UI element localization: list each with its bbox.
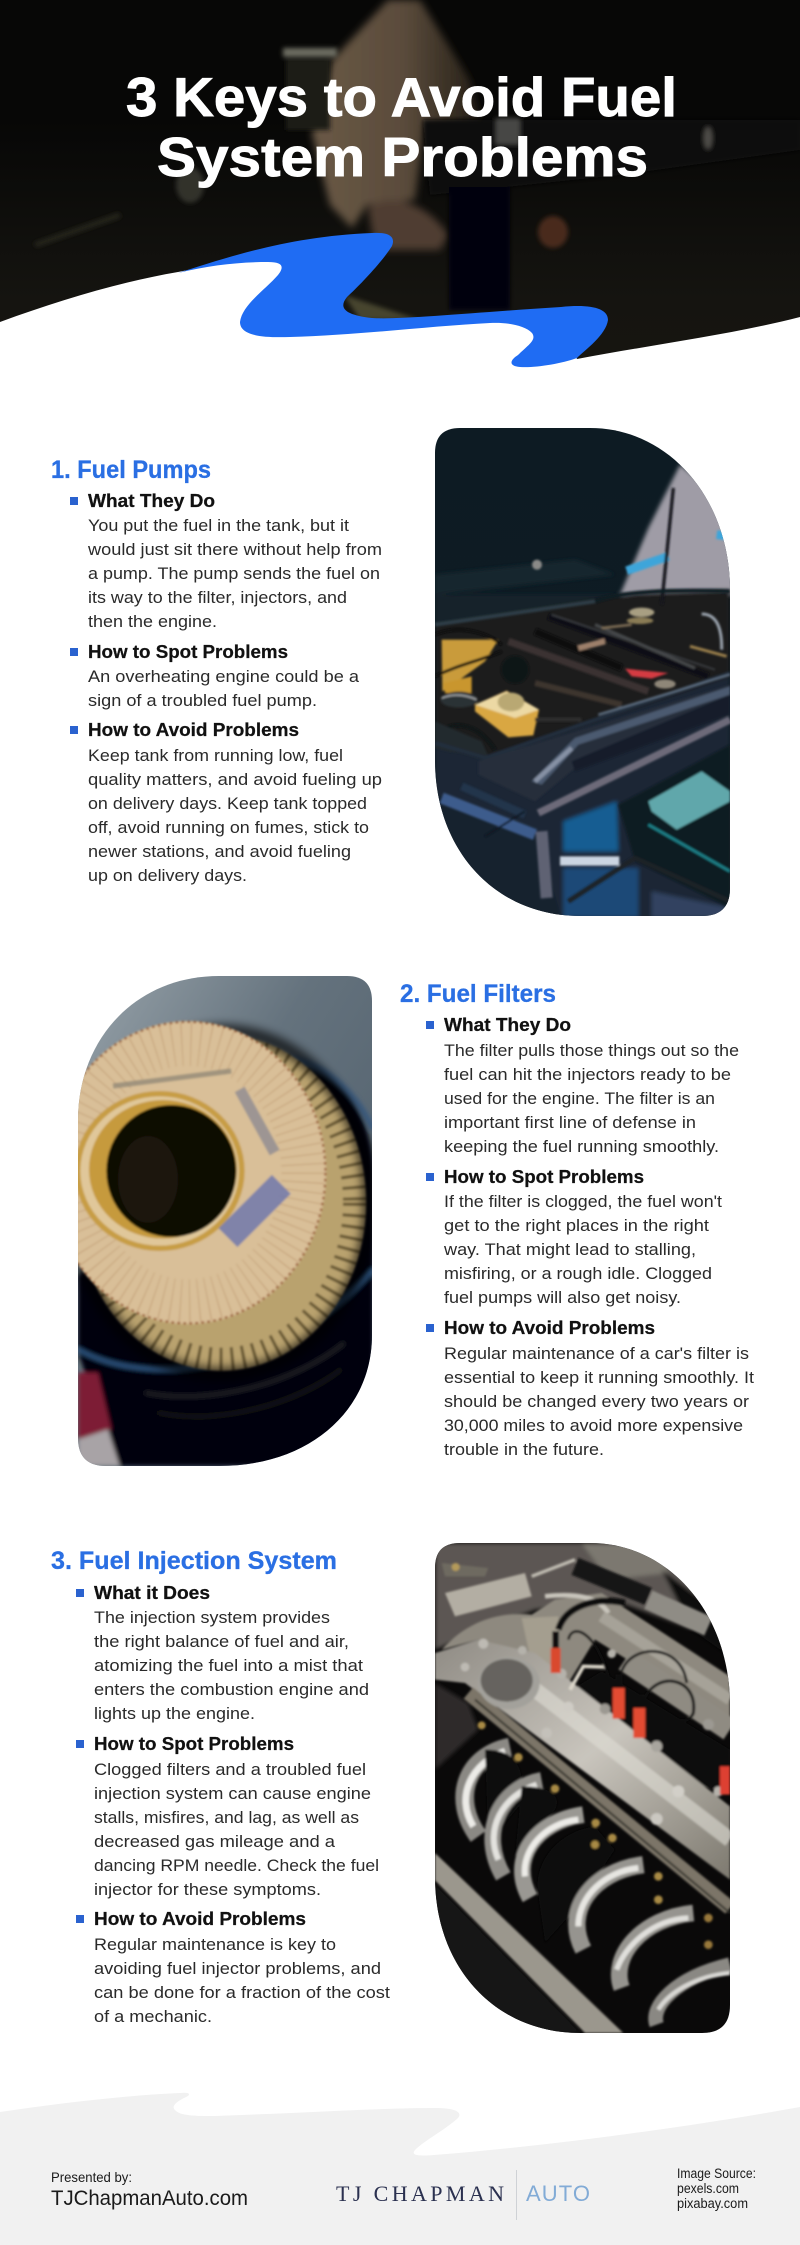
item: how to avoid problems: essential to keep it running smoothly. It — [444, 1369, 754, 1387]
item: how to spot problems: dancing RPM needle. Check the fuel — [94, 1857, 379, 1875]
item: how to avoid problems: How to Avoid Problems — [444, 1318, 655, 1338]
item: what they do: keeping the fuel running smoothly. — [444, 1138, 719, 1156]
item: how to avoid problems: Regular maintenance is key to — [94, 1936, 336, 1954]
item: how to avoid problems: should be changed every two years or — [444, 1393, 750, 1411]
item: how to spot problems: If the filter is clogged, the fuel won't — [444, 1193, 722, 1211]
image source credits — [677, 2166, 756, 2211]
presented by — [51, 2169, 248, 2210]
item: how to avoid problems: Keep tank from running low, fuel — [88, 747, 343, 765]
item: what they do: its way to the filter, injectors, and — [88, 589, 347, 607]
item: how to avoid problems: trouble in the future. — [444, 1441, 604, 1459]
item: how to spot problems: stalls, misfires, and lag, as well as — [94, 1809, 359, 1827]
item: how to spot problems — [70, 642, 360, 710]
item: what it does: lights up the engine. — [94, 1705, 255, 1723]
item: what they do: What They Do — [88, 491, 215, 511]
item: how to spot problems: fuel pumps will also get noisy. — [444, 1289, 681, 1307]
footer band — [0, 2093, 800, 2245]
panel: fuel injection system text — [51, 1547, 390, 2026]
presented by: TJChapmanAuto.com — [51, 2187, 248, 2210]
item: what they do — [426, 1015, 739, 1156]
heading: fuel filters: 2. Fuel Filters — [400, 980, 556, 1008]
header photo: hand holding fuel nozzle — [0, 0, 800, 359]
item: how to avoid problems: How to Avoid Problems — [94, 1909, 306, 1929]
item: what they do: What They Do — [444, 1015, 571, 1035]
photo: car engine bay under open hood — [435, 428, 735, 918]
item: what they do — [70, 491, 382, 631]
image source credits: Image Source: — [677, 2166, 756, 2181]
item: what they do: used for the engine. The filter is an — [444, 1090, 715, 1108]
logo: TJ Chapman Auto — [336, 2170, 590, 2220]
item: how to spot problems: get to the right places in the right — [444, 1217, 709, 1235]
heading: fuel pumps: 1. Fuel Pumps — [51, 456, 211, 484]
panel: fuel pumps text — [51, 456, 382, 885]
item: how to spot problems: An overheating engine could be a — [88, 668, 360, 686]
item: how to avoid problems: on delivery days. Keep tank topped — [88, 795, 367, 813]
item: how to spot problems: How to Spot Problems — [88, 642, 288, 662]
item: how to avoid problems: up on delivery days. — [88, 867, 247, 885]
item: how to spot problems: injection system can cause engine — [94, 1785, 371, 1803]
item: how to avoid problems — [426, 1318, 754, 1459]
item: what they do: then the engine. — [88, 613, 217, 631]
item: how to avoid problems — [76, 1909, 390, 2026]
photo: chrome engine manifold — [435, 1543, 730, 2033]
item: what they do: a pump. The pump sends the fuel on — [88, 565, 380, 583]
item: how to spot problems: How to Spot Problems — [444, 1167, 644, 1187]
title: 3 Keys to Avoid Fuel — [126, 66, 677, 128]
item: what it does — [76, 1583, 369, 1723]
item: how to avoid problems: can be done for a fraction of the cost — [94, 1984, 390, 2002]
item: what it does: The injection system provides — [94, 1609, 330, 1627]
item: what they do: would just sit there without help from — [87, 541, 382, 559]
heading: fuel injection system: 3. Fuel Injection System — [51, 1547, 337, 1575]
item: how to avoid problems: avoiding fuel injector problems, and — [94, 1960, 381, 1978]
item: how to spot problems: Clogged filters and a troubled fuel — [94, 1761, 366, 1779]
item: how to spot problems: misfiring, or a rough idle. Clogged — [444, 1265, 712, 1283]
item: how to avoid problems: of a mechanic. — [94, 2008, 212, 2026]
item: what they do: fuel can hit the injectors ready to be — [444, 1066, 731, 1084]
item: how to spot problems: way. That might lead to stalling, — [443, 1241, 696, 1259]
item: how to avoid problems: quality matters, and avoid fueling up — [88, 771, 382, 789]
item: what it does: What it Does — [94, 1583, 210, 1603]
item: how to avoid problems: How to Avoid Problems — [88, 720, 299, 740]
item: how to avoid problems: Regular maintenance of a car's filter is — [444, 1345, 749, 1363]
logo: TJ Chapman Auto: TJ CHAPMAN — [336, 2181, 504, 2206]
item: what they do: important first line of defense in — [444, 1114, 696, 1132]
item: what they do: The filter pulls those things out so the — [444, 1042, 739, 1060]
photo: fuel filter cartridge — [50, 976, 373, 1466]
item: how to spot problems: sign of a troubled fuel pump. — [88, 692, 317, 710]
item: how to spot problems: decreased gas mileage and a — [94, 1833, 336, 1851]
item: how to avoid problems: off, avoid running on fumes, stick to — [88, 819, 369, 837]
blue wave accent — [178, 233, 608, 367]
item: how to avoid problems: 30,000 miles to avoid more expensive — [444, 1417, 743, 1435]
item: how to avoid problems: newer stations, and avoid fueling — [88, 843, 351, 861]
logo: TJ Chapman Auto: AUTO — [526, 2181, 590, 2206]
item: how to spot problems: injector for these symptoms. — [94, 1881, 321, 1899]
item: how to avoid problems — [70, 720, 382, 885]
item: what it does: atomizing the fuel into a mist that — [94, 1657, 363, 1675]
item: what it does: the right balance of fuel and air, — [94, 1633, 349, 1651]
item: how to spot problems: How to Spot Problems — [94, 1734, 294, 1754]
presented by: Presented by: — [51, 2169, 132, 2185]
item: what they do: You put the fuel in the tank, but it — [88, 517, 349, 535]
white wave below header — [0, 250, 800, 430]
title — [126, 66, 677, 188]
title: System Problems — [157, 126, 648, 188]
panel: fuel filters text — [400, 980, 754, 1459]
item: what it does: enters the combustion engine and — [94, 1681, 369, 1699]
item: how to spot problems — [76, 1734, 379, 1899]
item: how to spot problems — [426, 1167, 722, 1307]
image source credits: pixabay.com — [677, 2196, 748, 2211]
image source credits: pexels.com — [677, 2181, 739, 2196]
